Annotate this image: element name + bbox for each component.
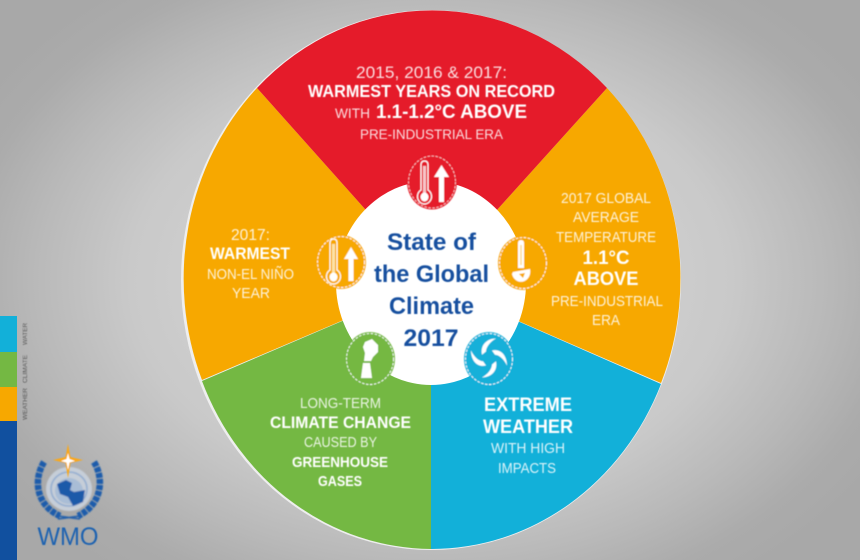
WMO logo — [38, 444, 100, 551]
sidebar colour bar — [0, 316, 17, 560]
text block: warmest non-El Nino year: 2017: — [231, 227, 270, 244]
text block: 2017 global average temperature: AVERAGE — [573, 209, 639, 226]
text block: long-term climate change: GASES — [318, 473, 362, 490]
title — [374, 229, 489, 352]
sidebar vertical labels — [23, 322, 29, 420]
text block: warmest years on record: 2015, 2016 & 2017: — [356, 64, 507, 82]
text block: 2017 global average temperature: 1.1°C — [582, 248, 630, 269]
title: the Global — [374, 261, 489, 288]
text block: warmest years on record: WITH — [335, 105, 370, 121]
text block: 2017 global average temperature: 2017 GLOBAL — [561, 190, 651, 207]
panel: global temperature (orange right) — [431, 88, 680, 383]
panel: extreme weather (blue) — [431, 283, 661, 549]
text block: warmest non-El Nino year — [207, 227, 294, 302]
title: State of — [387, 229, 477, 256]
panel: warmest non-El Nino year (orange left) — [184, 88, 431, 380]
icon: green fist and smokestack — [345, 332, 395, 386]
text block: warmest years on record: WARMEST YEARS ON RECORD — [308, 81, 555, 101]
text block: extreme weather: WITH HIGH — [491, 441, 565, 457]
text block: 2017 global average temperature: ERA — [592, 312, 620, 329]
text block: warmest non-El Nino year: YEAR — [232, 285, 270, 302]
text block: 2017 global average temperature: ABOVE — [574, 269, 638, 290]
icon: orange thermometer and arrow — [316, 235, 366, 289]
text block: extreme weather: IMPACTS — [498, 461, 556, 477]
icon: star — [53, 444, 83, 478]
icon: red thermometer and arrow — [407, 154, 457, 210]
text block: long-term climate change: CLIMATE CHANGE — [270, 414, 411, 432]
text block: 2017 global average temperature — [551, 190, 663, 329]
icon: globe — [46, 467, 92, 511]
sidebar vertical labels: WATER — [23, 322, 29, 345]
text block: long-term climate change — [270, 396, 411, 490]
title: Climate — [389, 293, 474, 320]
text block: warmest non-El Nino year: NON-EL NIÑO — [207, 266, 294, 283]
white rim — [181, 10, 681, 550]
text block: 2017 global average temperature: PRE-INDUSTRIAL — [551, 293, 663, 310]
text block: warmest years on record: 1.1-1.2°C ABOVE — [376, 102, 527, 123]
text block: long-term climate change: GREENHOUSE — [292, 454, 388, 471]
icon: blue cyclone — [464, 332, 514, 386]
text block: long-term climate change: LONG-TERM — [300, 396, 381, 412]
WMO wordmark: WMO — [38, 523, 98, 551]
circular diagram — [181, 10, 681, 550]
text block: warmest years on record: PRE-INDUSTRIAL ERA — [360, 126, 504, 142]
text block: warmest non-El Nino year: WARMEST — [210, 245, 290, 263]
text block: warmest years on record — [308, 64, 555, 142]
text block: long-term climate change: CAUSED BY — [304, 435, 377, 451]
panel: warmest years (red) — [257, 10, 607, 283]
title: 2017 — [404, 325, 458, 352]
text block: extreme weather: WEATHER — [483, 417, 573, 438]
text block: extreme weather: EXTREME — [484, 395, 572, 416]
sidebar vertical labels: CLIMATE — [23, 355, 29, 383]
panel: climate change (green) — [202, 283, 431, 549]
icon: orange thermometer with globe — [498, 236, 548, 290]
sidebar vertical labels: WEATHER — [23, 387, 29, 420]
centre disc — [336, 181, 526, 385]
text block: extreme weather — [483, 395, 573, 477]
icon: laurel wreath — [38, 462, 100, 519]
text block: 2017 global average temperature: TEMPERATURE — [556, 229, 656, 246]
